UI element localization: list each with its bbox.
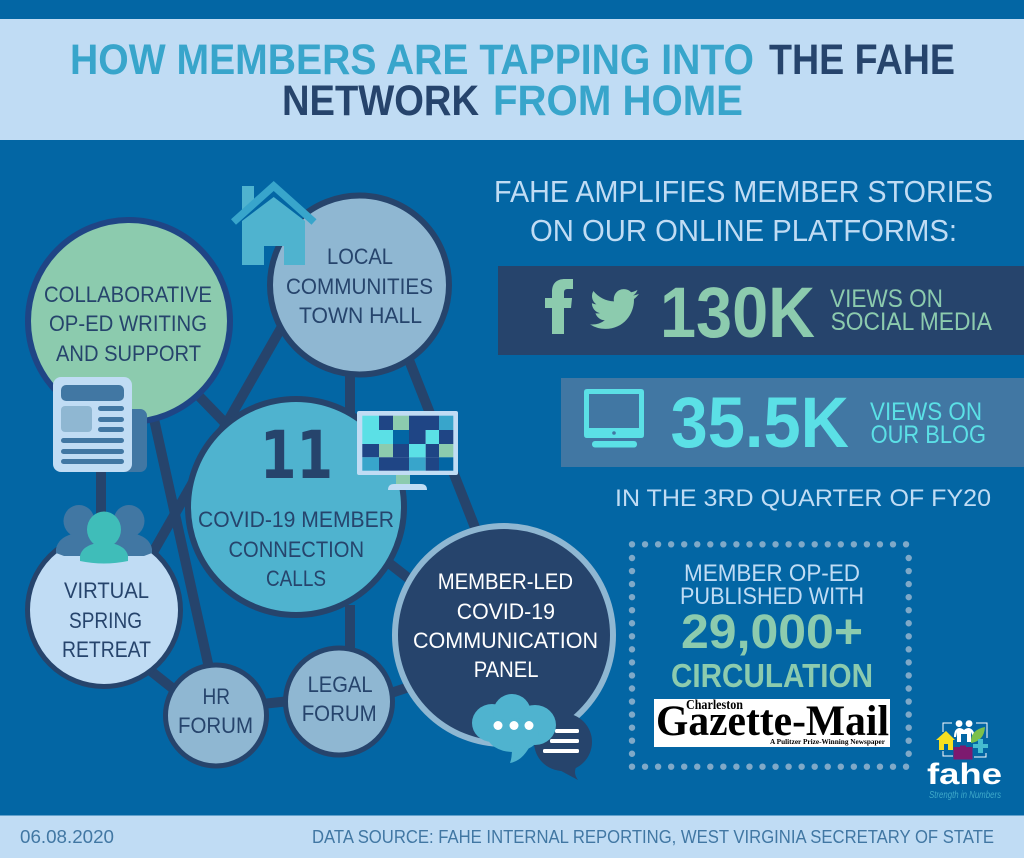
- footer band: [0, 816, 1024, 858]
- icon: house: [234, 186, 314, 265]
- stat: 35.5K: 35.5K: [670, 384, 849, 463]
- label: views on our blog: OUR BLOG: [871, 421, 986, 449]
- label: hr forum: FORUM: [178, 713, 253, 738]
- icon: speech bubbles: [472, 694, 592, 780]
- icon: monitor: [357, 411, 458, 490]
- label: legal forum: LEGAL: [308, 672, 373, 697]
- date: 06.08.2020: [20, 827, 114, 847]
- stat: 130K: 130K: [660, 274, 815, 353]
- label: member-led communication panel: [413, 569, 598, 682]
- label: member op-ed published with: [680, 560, 864, 610]
- panel: blog views: [561, 378, 1024, 467]
- title: NETWORK: [282, 77, 479, 125]
- label: member op-ed published with: PUBLISHED WITH: [680, 583, 864, 610]
- icon: computer: [584, 389, 644, 448]
- logo: charleston gazette-mail: Gazette-Mail: [656, 698, 889, 745]
- label: collaborative op-ed writing: COLLABORATIVE: [44, 282, 212, 307]
- label: covid-19 member connection calls: CALLS: [266, 566, 326, 591]
- label: legal forum: [302, 672, 377, 726]
- icon: newspaper: [53, 377, 147, 472]
- label: covid-19 member connection calls: CONNECTION: [228, 537, 364, 562]
- label: collaborative op-ed writing: [44, 282, 212, 366]
- icon: green leaf: [971, 727, 985, 743]
- label: virtual spring retreat: SPRING: [69, 608, 142, 633]
- label: views on social media: [830, 285, 992, 336]
- label: virtual spring retreat: RETREAT: [62, 637, 151, 662]
- label: virtual spring retreat: VIRTUAL: [64, 578, 149, 603]
- label: collaborative op-ed writing: AND SUPPORT: [56, 341, 201, 366]
- icon: twitter bird: [590, 289, 639, 329]
- tagline: Strength in Numbers: [929, 790, 1001, 801]
- label: views on our blog: VIEWS ON: [870, 398, 982, 426]
- number 11: 11: [260, 417, 333, 494]
- title: [70, 36, 955, 125]
- panel: local communities circle: [270, 196, 449, 374]
- icon: facebook: [545, 279, 573, 334]
- label: hr forum: [178, 684, 253, 738]
- title: FROM HOME: [493, 77, 743, 125]
- label: local communities town hall: COMMUNITIES: [286, 274, 433, 299]
- panel: social media views: [498, 266, 1024, 355]
- wordmark: fahe: fahe: [927, 758, 1002, 791]
- panel: member op-ed callout: [632, 544, 909, 767]
- logo: charleston gazette-mail: Charleston: [686, 698, 743, 713]
- text: in the 3rd quarter of fy20: IN THE 3RD QUARTER OF FY20: [615, 485, 991, 512]
- dotted border: [632, 544, 909, 767]
- label: local communities town hall: TOWN HALL: [299, 303, 422, 328]
- icon: family figures: [954, 720, 975, 742]
- label: circulation: CIRCULATION: [671, 657, 873, 694]
- label: hr forum: HR: [202, 684, 230, 709]
- label: virtual spring retreat: [62, 578, 151, 662]
- label: views on social media: VIEWS ON: [830, 285, 943, 313]
- title: THE FAHE: [769, 36, 955, 84]
- icon: people: [56, 505, 152, 564]
- network connector lines: [101, 323, 476, 704]
- heading: fahe amplifies member stories: [494, 174, 993, 248]
- title: HOW MEMBERS ARE TAPPING INTO: [70, 36, 754, 84]
- label: covid-19 member connection calls: COVID-19 MEMBER: [198, 507, 394, 532]
- icon: purple briefcase: [954, 746, 972, 760]
- label: member-led communication panel: COVID-19: [457, 599, 555, 624]
- logo: fahe: [927, 720, 1002, 801]
- panel: member-led covid-19 communication panel circle: [395, 526, 613, 744]
- label: views on our blog: [870, 398, 986, 449]
- label: member-led communication panel: COMMUNICATION: [413, 628, 598, 653]
- label: local communities town hall: [286, 244, 433, 328]
- heading: fahe amplifies member stories: FAHE AMPLIFIES MEMBER STORIES: [494, 174, 993, 209]
- panel: covid-19 member connection calls circle: [188, 399, 404, 615]
- icon: cyan plus: [973, 739, 988, 753]
- label: local communities town hall: LOCAL: [327, 244, 393, 269]
- header band: [0, 19, 1024, 140]
- label: legal forum: FORUM: [302, 701, 377, 726]
- label: views on social media: SOCIAL MEDIA: [831, 308, 992, 336]
- panel: hr forum circle: [166, 665, 266, 766]
- panel: legal forum circle: [286, 648, 392, 755]
- label: member-led communication panel: MEMBER-LED: [438, 569, 573, 594]
- logo: charleston gazette-mail: A Pulitzer Prize-Winning Newspaper: [770, 737, 886, 746]
- panel: collaborative op-ed circle: [28, 220, 230, 422]
- stat: 29,000+: 29,000+: [681, 606, 863, 659]
- panel: virtual spring retreat circle: [28, 534, 180, 686]
- label: member op-ed published with: MEMBER OP-ED: [684, 560, 860, 587]
- label: member-led communication panel: PANEL: [474, 657, 538, 682]
- label: covid-19 member connection calls: [198, 507, 394, 591]
- icon: yellow house: [936, 731, 955, 750]
- label: collaborative op-ed writing: OP-ED WRITING: [49, 311, 207, 336]
- heading: fahe amplifies member stories: ON OUR ONLINE PLATFORMS:: [530, 213, 957, 248]
